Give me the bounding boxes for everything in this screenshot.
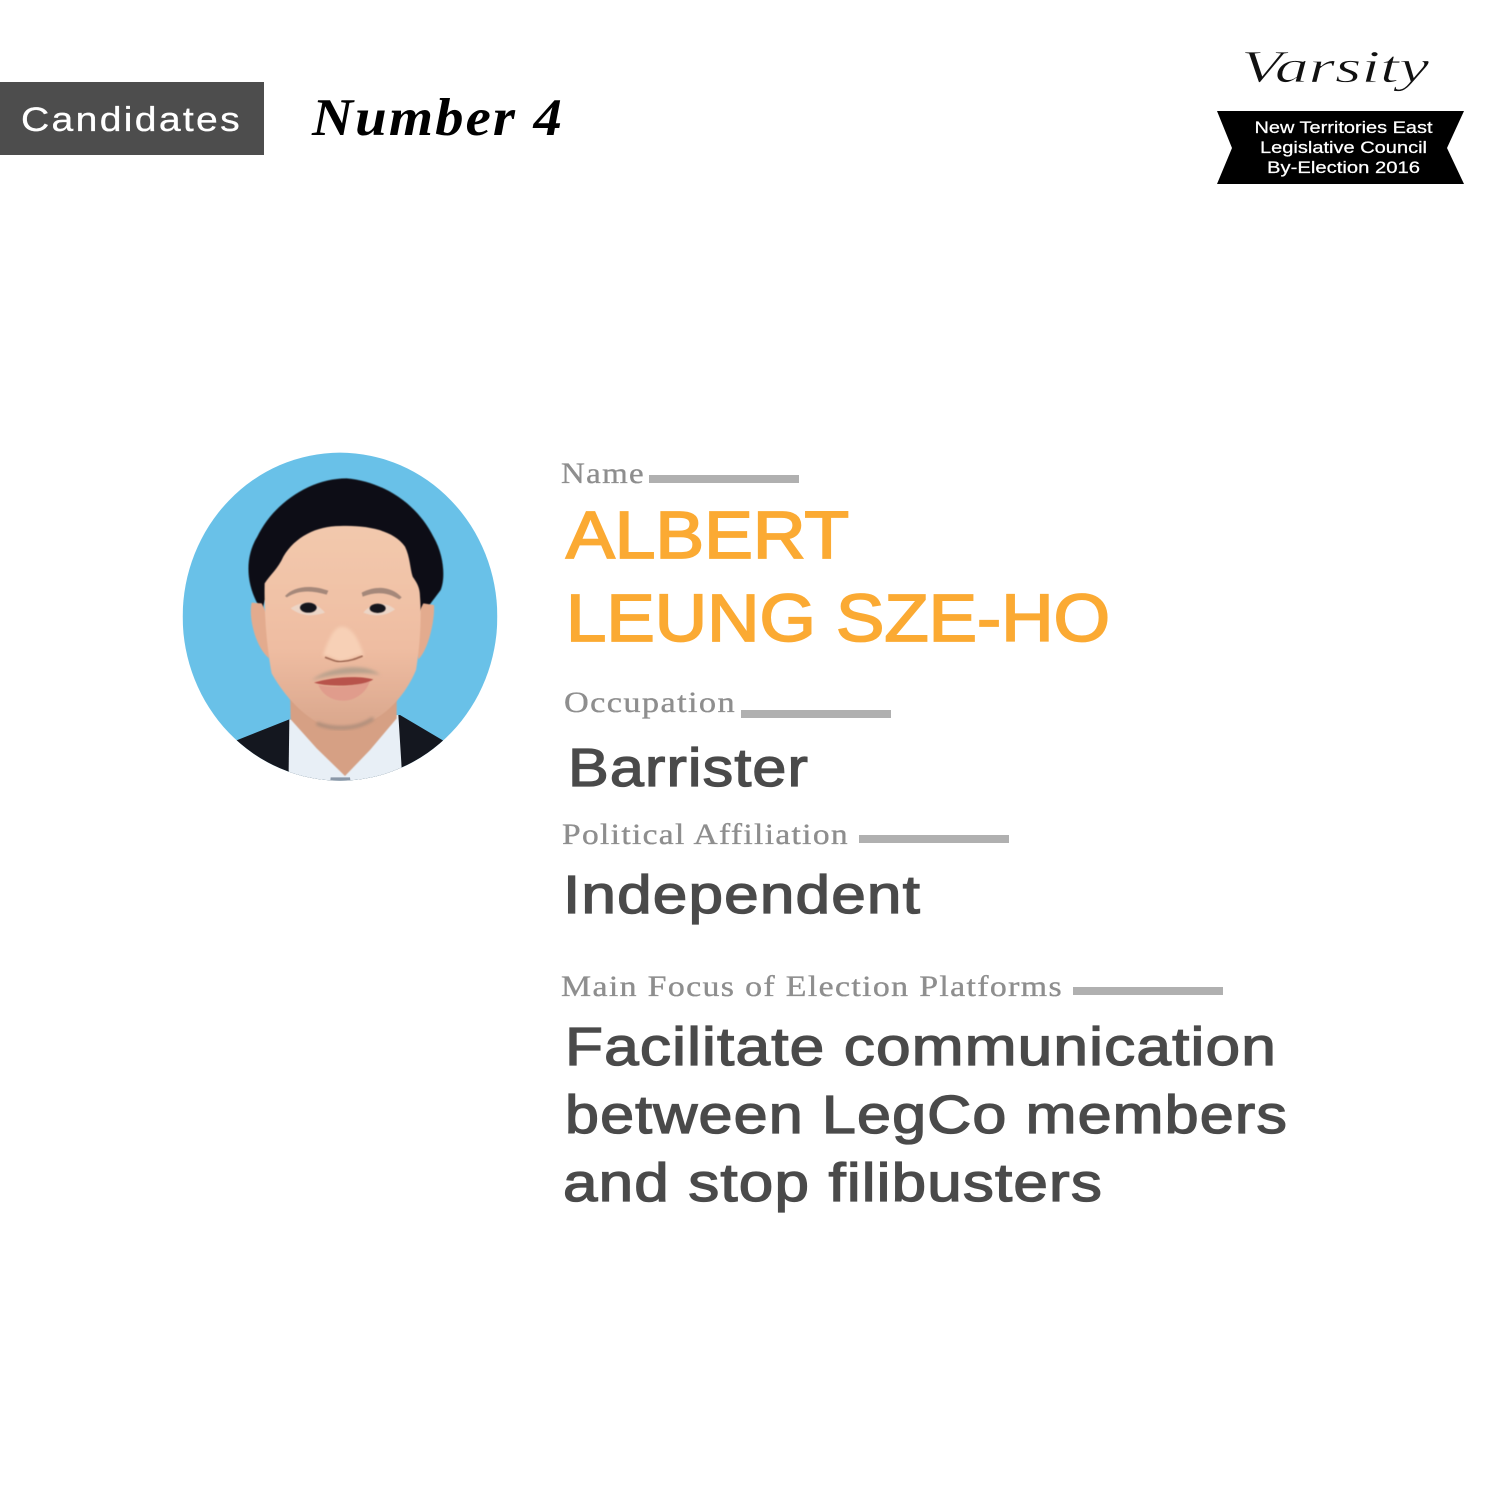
ribbon: by-election xyxy=(1217,111,1464,184)
portrait: hair xyxy=(248,478,443,618)
portrait: nose xyxy=(323,627,364,662)
label: Main Focus of Election Platforms: Main Focus of Election Platforms xyxy=(561,970,1063,1003)
ribbon: by-election: Legislative Council xyxy=(1260,138,1427,157)
portrait: tie xyxy=(330,777,350,781)
occupation value: Barrister xyxy=(568,738,809,798)
portrait: lips xyxy=(314,677,373,701)
ribbon: by-election: New Territories East xyxy=(1254,118,1433,137)
section tag: Candidates xyxy=(0,82,264,155)
portrait: eyes xyxy=(291,603,395,615)
portrait: moustache shadow xyxy=(312,667,380,681)
affiliation value: Independent xyxy=(563,865,921,925)
candidate name: ALBERT xyxy=(566,499,849,573)
label: Political Affiliation: Political Affiliation xyxy=(562,818,849,851)
label: Name: Name xyxy=(561,457,645,490)
platform text: Facilitate communication xyxy=(565,1017,1277,1077)
label: Main Focus of Election Platforms xyxy=(561,970,1223,1003)
portrait: face xyxy=(265,526,421,729)
portrait: shirt xyxy=(289,715,402,783)
ribbon: by-election: By-Election 2016 xyxy=(1267,158,1420,177)
section tag: Candidates: Candidates xyxy=(21,101,242,139)
platform text: and stop filibusters xyxy=(563,1153,1103,1213)
candidate name xyxy=(566,499,1110,656)
label: Occupation: Occupation xyxy=(564,686,736,719)
portrait: ears xyxy=(251,603,434,659)
label: Name xyxy=(561,457,799,490)
label: Political Affiliation xyxy=(562,818,1009,851)
logo: Varsity: Varsity xyxy=(1241,41,1430,92)
label: Occupation xyxy=(564,686,891,719)
portrait: eyebrows xyxy=(285,587,402,599)
platform text: between LegCo members xyxy=(565,1085,1288,1145)
platform text xyxy=(563,1017,1288,1213)
portrait: suit xyxy=(236,715,443,781)
heading: Number 4: Number 4 xyxy=(311,89,564,147)
portrait: candidate photo xyxy=(183,440,497,790)
candidate name: LEUNG SZE-HO xyxy=(566,582,1110,656)
portrait: chin shadow xyxy=(317,718,373,728)
portrait: neck xyxy=(290,698,398,776)
